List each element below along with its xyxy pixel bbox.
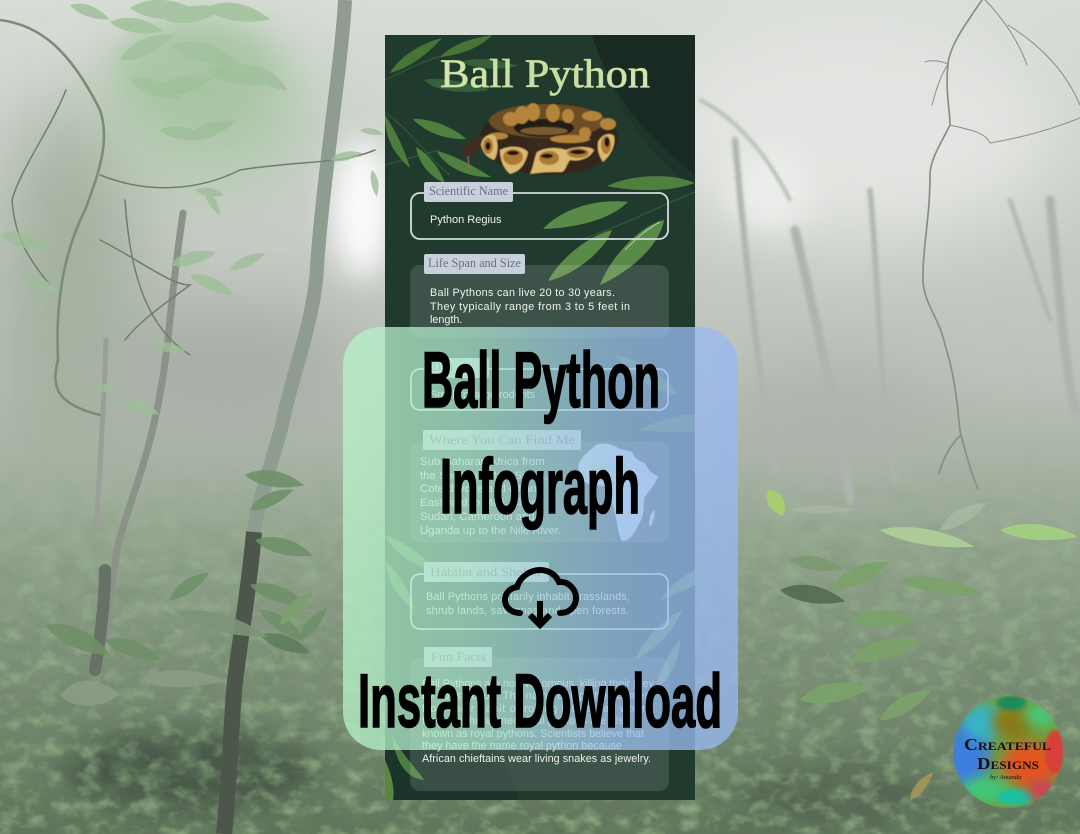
- panel: fun facts: Ball Pythons are non-venomous, killing their prey: [422, 678, 655, 690]
- foliage upper left: [0, 0, 384, 419]
- panel: life span and size: Life Span and Size: [428, 256, 521, 270]
- panel: where you can find me: the Senegal, Mali, Sierra,: [420, 470, 548, 482]
- panel: habitat and shelter: [411, 562, 668, 629]
- poster title: Ball Python: [440, 51, 650, 96]
- second tree trunk: [95, 213, 183, 670]
- panel: life span and size: Ball Pythons can live 20 to 30 years.: [430, 287, 615, 299]
- headline: Infograph: Infograph: [440, 442, 640, 530]
- panel: fun facts: [410, 647, 669, 791]
- panel: fun facts: Fun Facts: [431, 650, 486, 664]
- panel: life span and size: They typically range from 3 to 5 feet in: [430, 301, 630, 313]
- leaves: right branch: [543, 176, 695, 285]
- panel: where you can find me: Sudan, Cameroon and: [420, 511, 535, 523]
- distant misty trees: [700, 100, 1075, 500]
- headline: Ball Python: Ball Python: [422, 335, 660, 424]
- panel: fun facts: from their habit of rolling into a ball when: [422, 703, 648, 715]
- panel: fun facts: they have the name royal python because: [422, 740, 622, 752]
- panel: where you can find me: Where You Can Find Me: [429, 433, 576, 447]
- panel: where you can find me: Cote d'Ivoire and Ghana: [420, 483, 544, 495]
- logo: Createful Designs badge: by: Amanda: [990, 774, 1021, 781]
- panel: scientific name: [411, 182, 668, 239]
- panel: diet: Small to large rodents: [430, 389, 536, 401]
- map: Africa: [578, 444, 658, 541]
- leaves: lower left and right: [385, 355, 695, 800]
- logo: Createful Designs badge: Createful: [964, 735, 1051, 754]
- panel: where you can find me: Eastward to Mali, Chad,: [420, 497, 541, 509]
- panel: life span and size: length.: [430, 314, 462, 326]
- hanging vine right: [923, 0, 1080, 489]
- panel: where you can find me: Uganda up to the Nile River.: [420, 525, 561, 537]
- panel: habitat and shelter: shrub lands, savannas and open forests.: [426, 605, 629, 617]
- panel: diet: Diet: [432, 360, 454, 374]
- panel: where you can find me: Sub-Saharan Africa from: [420, 456, 545, 468]
- panel: fun facts: African chieftains wear living snakes as jewelry.: [422, 753, 651, 765]
- hanging vines left: [0, 20, 375, 415]
- icon: coiled ball python: [462, 103, 618, 175]
- panel: diet: [411, 358, 668, 410]
- foliage lower right: [762, 485, 1078, 803]
- panel: habitat and shelter: Ball Pythons primarily inhabit grasslands,: [426, 591, 630, 603]
- panel: scientific name: Scientific Name: [429, 184, 508, 198]
- panel: fun facts: they are threatened. Ball pythons are also: [422, 715, 630, 727]
- logo: Createful Designs badge: Designs: [977, 754, 1039, 773]
- foliage lower left: [42, 466, 331, 706]
- translucent gradient overlay card: [343, 327, 738, 750]
- panel: fun facts: by constriction. The name ball python comes: [422, 690, 651, 702]
- icon: cloud download: [505, 570, 576, 625]
- panel: scientific name: Python Regius: [430, 214, 502, 226]
- leaves: top left branch: [385, 35, 518, 183]
- panel: life span and size: [410, 254, 669, 338]
- infographic poster: [385, 35, 695, 800]
- main tree trunk: [224, 0, 345, 834]
- logo: Createful Designs badge: [946, 696, 1065, 808]
- panel: habitat and shelter: Habitat and Shelter: [430, 565, 543, 579]
- panel: fun facts: known as royal pythons. Scientists believe that: [422, 728, 644, 740]
- panel: where you can find me: [410, 430, 669, 543]
- headline: Instant Download: Instant Download: [358, 659, 722, 744]
